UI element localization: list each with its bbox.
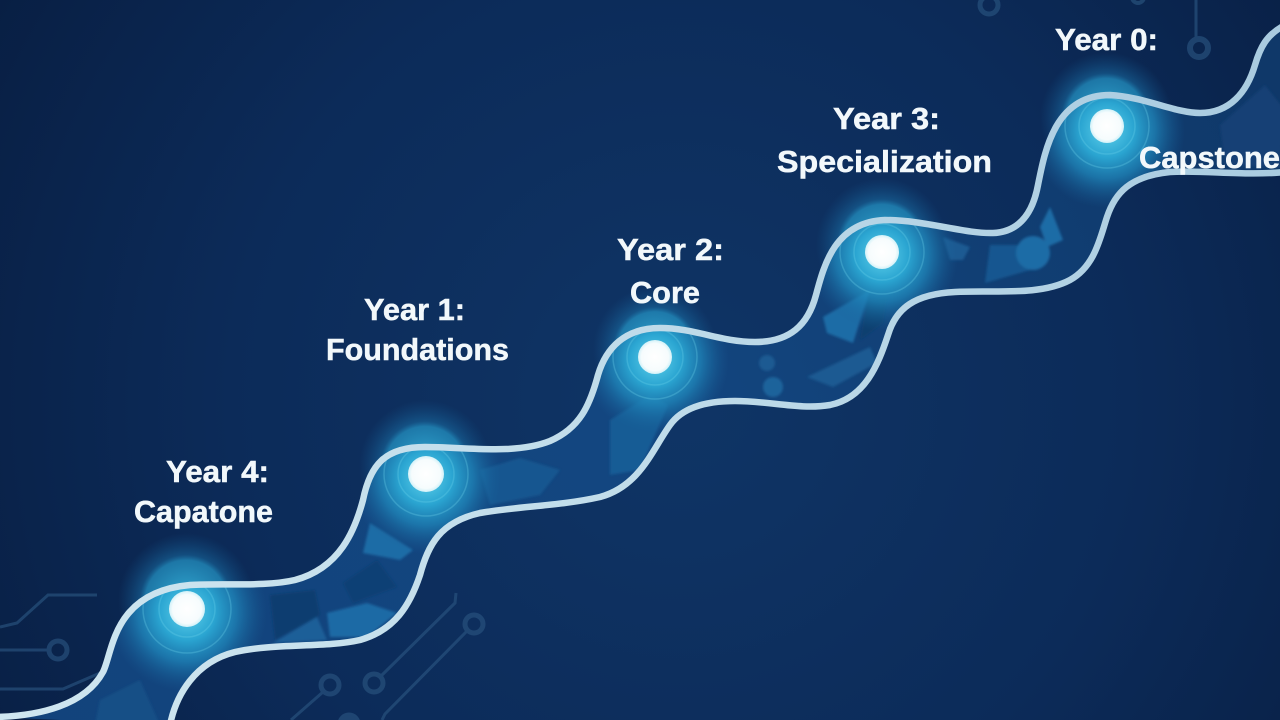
node: Year 4 (169, 591, 205, 627)
ribbon bottom edge (170, 172, 1280, 720)
label: Year 1 Foundations (326, 292, 509, 367)
label: Year 2 Core: Year 2: (617, 232, 724, 267)
ribbon glow rings (143, 84, 1149, 653)
label: Year 4 Capatone: Year 4: (166, 454, 269, 489)
label: Year 2 Core: Core (630, 275, 700, 310)
outer glow halos (118, 52, 1172, 669)
ribbon inner glows (120, 98, 1178, 684)
label: Year 0 Capstone: Capstone (1139, 140, 1280, 175)
label: Year 3 Specialization (777, 101, 992, 179)
circuit traces bottom-center (291, 593, 483, 720)
circuit traces top-right (980, 0, 1208, 57)
node: Year 1 (408, 456, 444, 492)
label: Year 4 Capatone: Capatone (134, 494, 273, 529)
label: Year 3 Specialization: Specialization (777, 144, 992, 179)
label: Year 2 Core (617, 232, 724, 310)
label: Year 1 Foundations: Year 1: (364, 292, 465, 327)
label: Year 3 Specialization: Year 3: (833, 101, 940, 136)
node: Year 3 (865, 235, 899, 269)
label: Year 0 Capstone (1055, 22, 1280, 175)
circuit traces bottom-left (0, 595, 100, 689)
label: Year 1 Foundations: Foundations (326, 332, 509, 367)
label: Year 4 Capatone (134, 454, 273, 529)
node: Year 2 (638, 340, 672, 374)
node: Year 0 (1090, 109, 1124, 143)
label: Year 0 Capstone: Year 0: (1055, 22, 1158, 57)
